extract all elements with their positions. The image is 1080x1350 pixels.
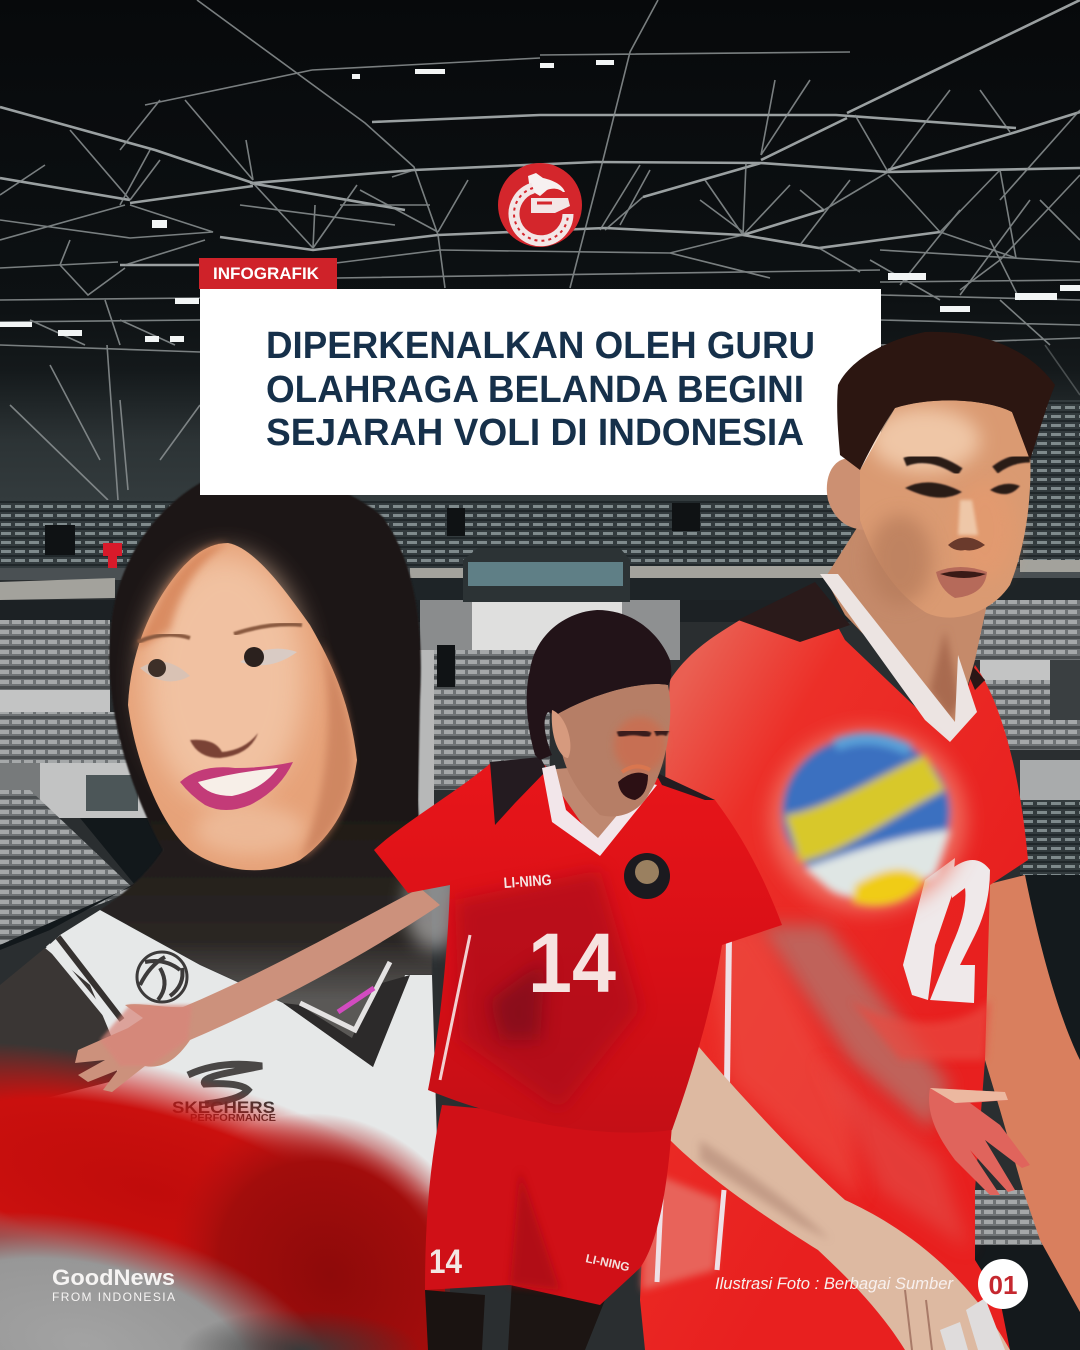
branding: GoodNews: FROM INDONESIA bbox=[52, 1290, 175, 1304]
centre bar of G bbox=[531, 198, 570, 213]
branding: GoodNews: GoodNews bbox=[52, 1265, 175, 1290]
jersey side stripes bbox=[727, 935, 729, 1085]
side stripe bbox=[440, 935, 470, 1080]
neck bbox=[825, 520, 990, 730]
collar bbox=[820, 574, 977, 742]
collar bbox=[542, 765, 657, 856]
tag: infografik bbox=[199, 258, 337, 289]
finger tape bbox=[940, 1298, 1005, 1350]
scoreboard bbox=[463, 548, 630, 650]
brand: LI-NING bbox=[503, 872, 552, 892]
jersey bbox=[0, 910, 440, 1240]
page number badge bbox=[978, 1259, 1028, 1309]
ear bbox=[827, 458, 868, 530]
ring bbox=[514, 188, 568, 241]
title card bbox=[199, 258, 881, 495]
face bbox=[556, 684, 670, 816]
ear bbox=[552, 710, 570, 758]
jersey body bbox=[640, 585, 1028, 1350]
branding: GoodNews bbox=[52, 1265, 175, 1304]
legs bbox=[425, 1290, 485, 1350]
person: woman in hijab bbox=[0, 473, 465, 1240]
headline: SEJARAH VOLI DI INDONESIA bbox=[266, 412, 804, 454]
person: centre player number 14 bbox=[75, 610, 782, 1350]
face bbox=[860, 400, 1030, 618]
headline: DIPERKENALKAN OLEH GURU bbox=[266, 325, 815, 367]
roof truss lines, bracing bbox=[0, 0, 1080, 520]
person: man with number 12 jersey bbox=[640, 332, 1080, 1350]
shorts bbox=[425, 1105, 672, 1305]
white panel bbox=[200, 289, 881, 495]
eagle head bbox=[528, 173, 565, 196]
volleyball, motion blurred bbox=[770, 728, 966, 912]
eyes bbox=[140, 662, 190, 681]
extended arm bbox=[75, 888, 440, 1092]
photo credit: Ilustrasi Foto : Berbagai Sumber bbox=[715, 1274, 954, 1293]
collar bbox=[283, 975, 410, 1067]
arena stands bbox=[0, 500, 1080, 568]
hand on jersey bbox=[929, 1088, 1030, 1195]
jersey sponsor bbox=[172, 1064, 276, 1124]
nose bbox=[948, 538, 985, 550]
page number badge: 01 bbox=[989, 1270, 1017, 1300]
nose bbox=[190, 733, 258, 758]
number 12 bbox=[903, 858, 990, 1003]
jersey logo bbox=[137, 952, 187, 1002]
tag: infografik: INFOGRAFIK bbox=[213, 264, 320, 283]
blur: bottom left foreground bbox=[0, 1000, 450, 1350]
face bbox=[128, 543, 357, 870]
roof truss lines, main chords bbox=[0, 0, 1080, 265]
hijab bbox=[100, 473, 432, 1067]
roof lights bbox=[0, 60, 1080, 342]
headline bbox=[266, 325, 815, 454]
logo emblem bbox=[498, 163, 582, 247]
headline: OLAHRAGA BELANDA BEGINI bbox=[266, 369, 804, 411]
forearm bbox=[670, 1028, 1010, 1350]
person: centre player number 14: 14 bbox=[429, 1243, 462, 1281]
shoulder panels bbox=[738, 582, 850, 642]
shadow fade at neck bbox=[405, 860, 465, 950]
eyebrows and eyes bbox=[905, 458, 1030, 472]
badge bbox=[624, 853, 670, 899]
neck bbox=[545, 760, 660, 850]
hair bbox=[837, 332, 1055, 470]
jersey sponsor: SKECHERS bbox=[172, 1098, 275, 1117]
jersey drape shading bbox=[757, 925, 950, 1130]
jersey sponsor: PERFORMANCE bbox=[190, 1113, 276, 1124]
red seat marker bbox=[103, 543, 122, 568]
person: centre player number 14: LI-NING bbox=[584, 1251, 631, 1274]
mouth bbox=[936, 567, 987, 598]
sleeve panels bbox=[490, 757, 547, 825]
sleeve bbox=[0, 948, 117, 1110]
smile bbox=[180, 762, 293, 810]
jersey bbox=[374, 762, 782, 1133]
number 14: 14 bbox=[528, 916, 616, 1010]
arm right bbox=[985, 875, 1080, 1312]
hair bbox=[527, 610, 671, 760]
